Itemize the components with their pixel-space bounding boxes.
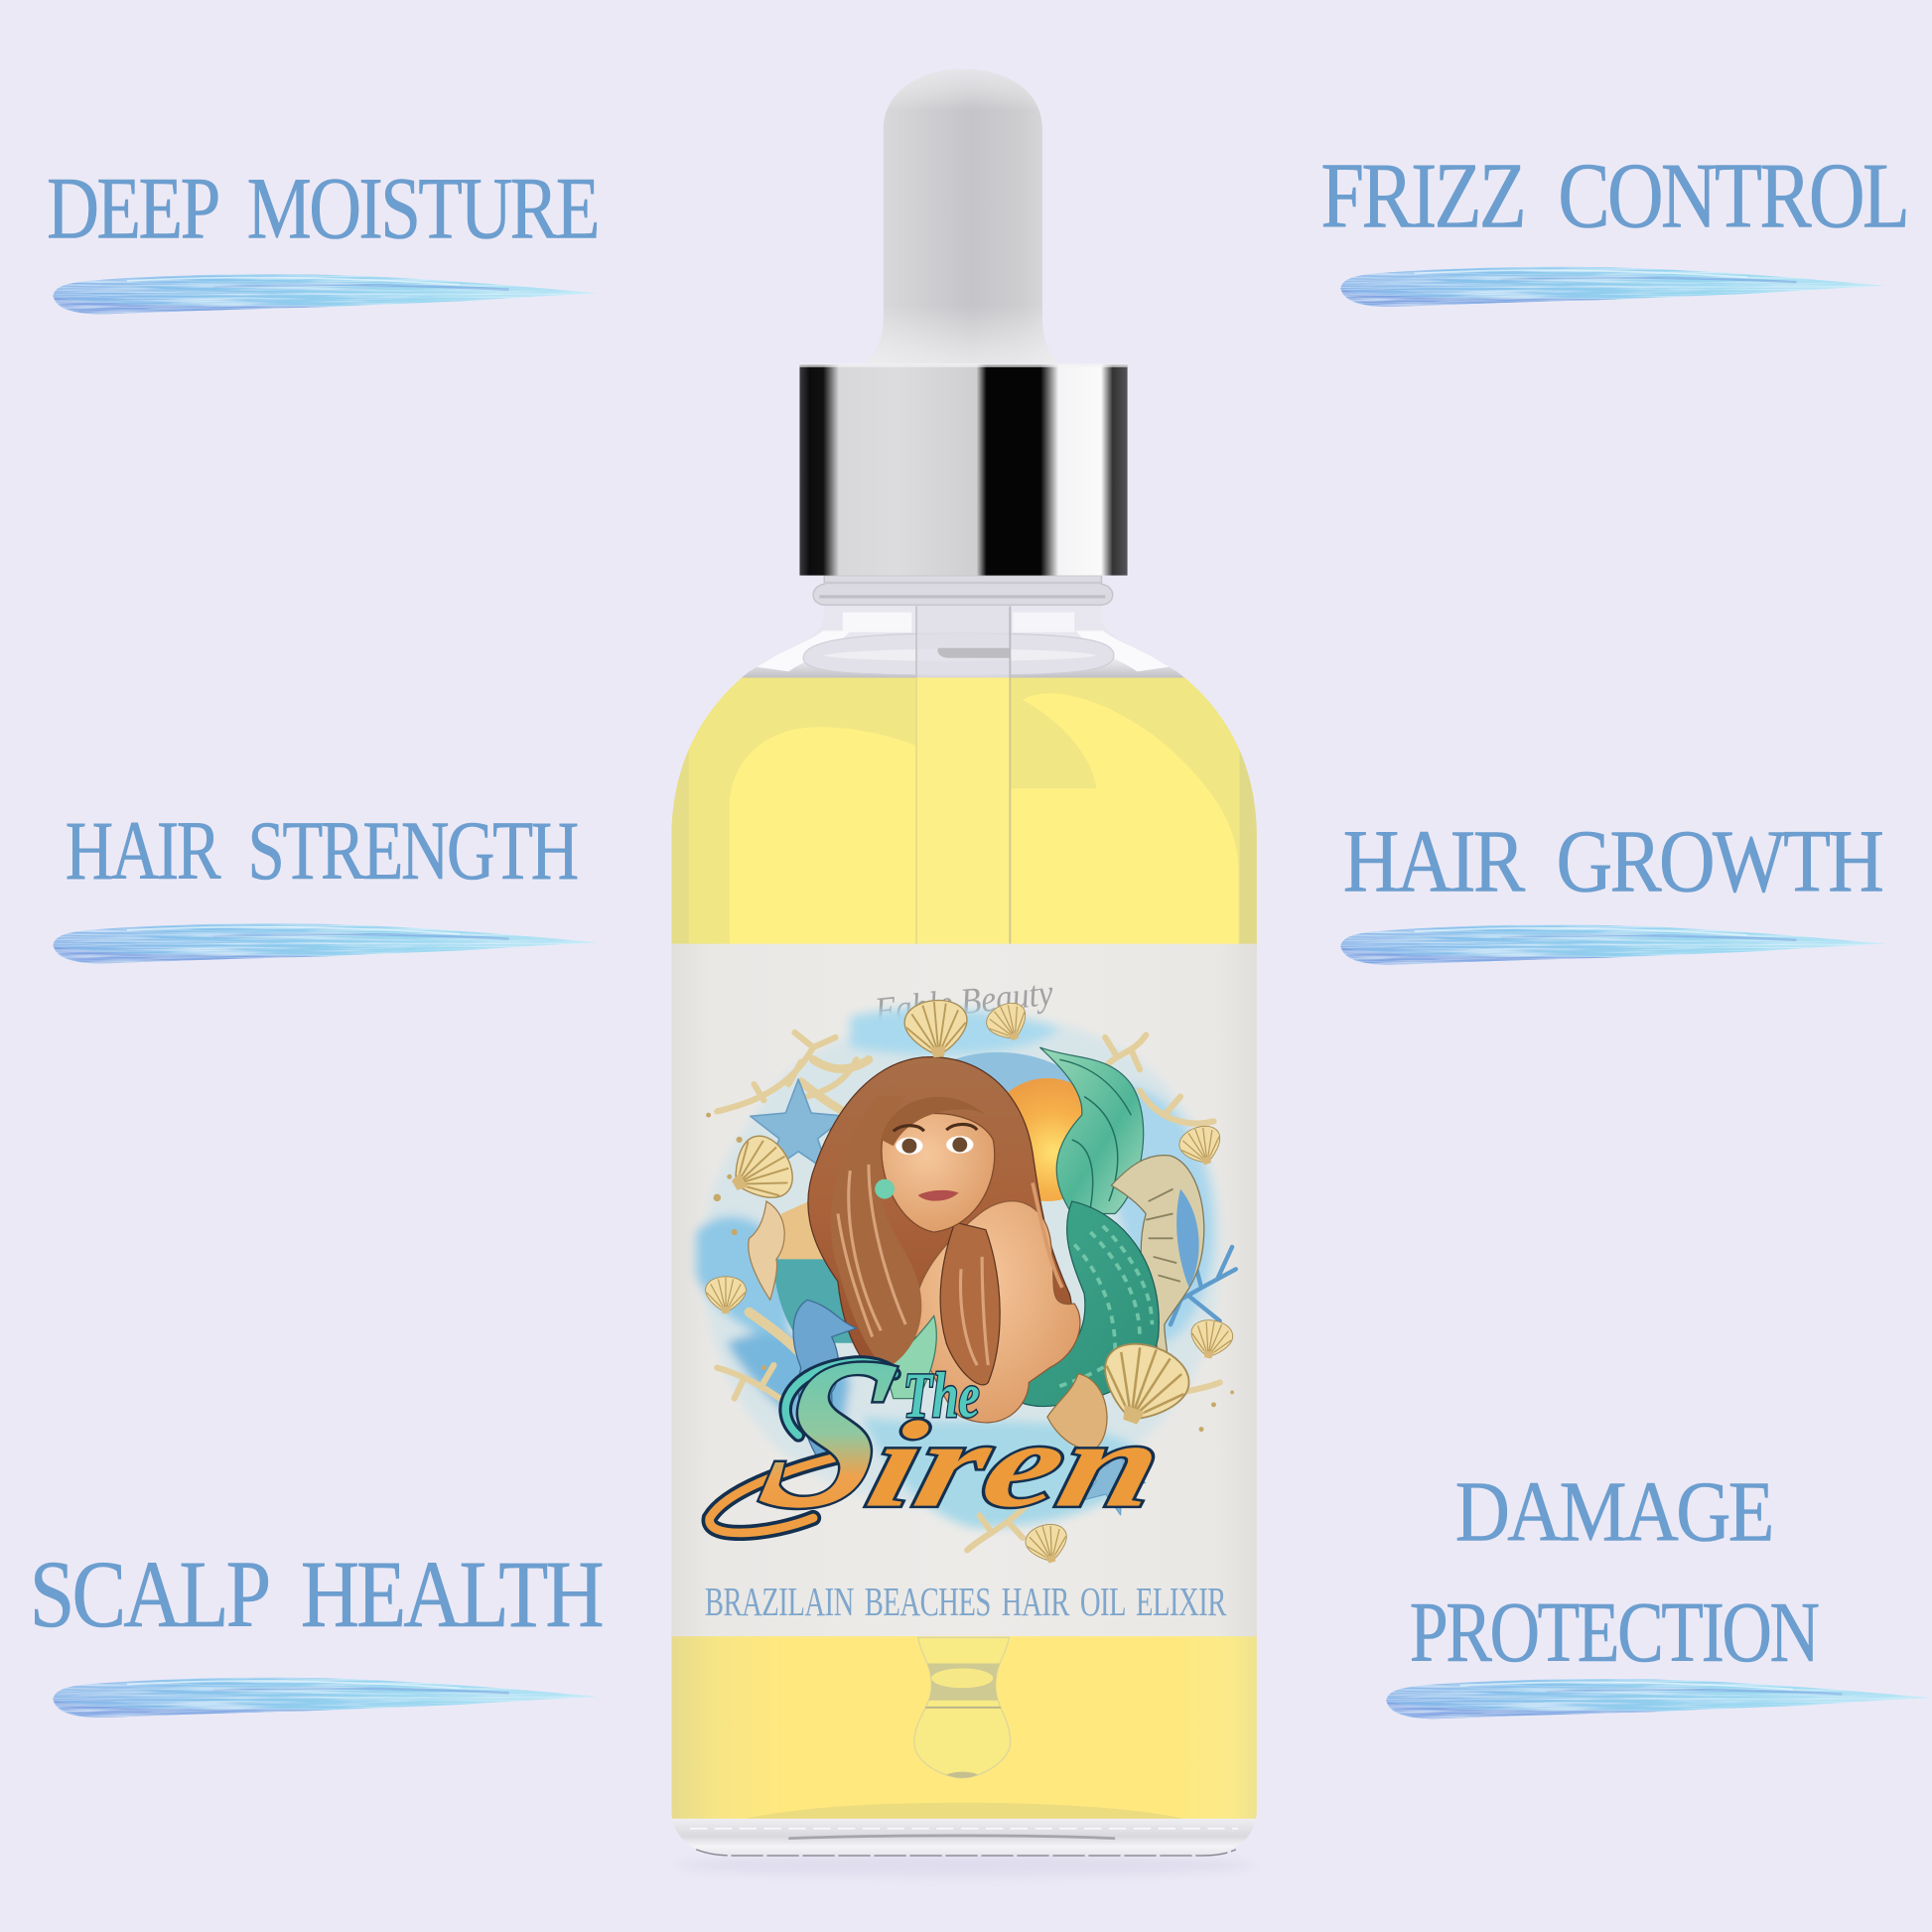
oil upper [665, 678, 1269, 949]
starfish lower [1069, 1436, 1154, 1519]
oil lower [665, 1626, 1269, 1820]
conch shell lower [1047, 1374, 1107, 1449]
brand signature: Fable Beauty [872, 973, 1055, 1032]
conch shell [749, 1201, 784, 1300]
benefit: damage protection: DAMAGE [1455, 1463, 1772, 1559]
hair front strands [831, 1097, 1062, 1385]
sky, sun and sea scene [773, 1052, 1109, 1343]
product name: BRAZILAIN BEACHES HAIR OIL ELIXIR [705, 1580, 1227, 1624]
rubber dropper bulb [864, 69, 1058, 364]
glass base [672, 1819, 1256, 1850]
ground shadow [675, 1854, 1254, 1877]
benefit: deep moisture [47, 160, 598, 314]
logo: S swash [710, 1362, 895, 1533]
coral branches [717, 1033, 1220, 1550]
mermaid tail body [1004, 1201, 1159, 1406]
benefit: damage protection [1386, 1463, 1931, 1719]
benefit: damage protection: PROTECTION [1410, 1585, 1819, 1680]
watercolor splash [696, 1009, 1222, 1528]
logo: The Siren: iren [856, 1397, 1175, 1533]
logo: The Siren [743, 1313, 1175, 1553]
bottle [665, 69, 1269, 1877]
gold splatter [706, 1113, 1234, 1432]
mermaid tail fin [1039, 1047, 1144, 1213]
logo: The Siren: The [903, 1359, 980, 1431]
benefit: hair growth [1340, 810, 1885, 965]
benefit: scalp health: SCALP HEALTH [30, 1541, 603, 1647]
benefit: hair strength [53, 805, 598, 964]
logo: The Siren: S [743, 1313, 919, 1553]
hair back [808, 1057, 1071, 1368]
glass dropper tip [914, 1637, 1011, 1792]
mermaid body and arm [913, 1201, 1080, 1423]
benefit: frizz control [1320, 144, 1907, 307]
glass bottle body [665, 573, 1269, 1861]
product label [671, 944, 1257, 1636]
neck ring [813, 576, 1113, 605]
bikini top [885, 1315, 936, 1399]
benefit: scalp health [30, 1541, 603, 1718]
metal collar [799, 363, 1128, 576]
blue coral [1171, 1247, 1236, 1324]
starfish [751, 1079, 847, 1173]
seahorse right [1111, 1156, 1204, 1368]
benefit: hair strength: HAIR STRENGTH [66, 805, 578, 897]
benefit: deep moisture: DEEP MOISTURE [47, 160, 598, 258]
face [875, 1097, 995, 1232]
seashells [706, 998, 1235, 1568]
seahorse left [793, 1300, 857, 1466]
